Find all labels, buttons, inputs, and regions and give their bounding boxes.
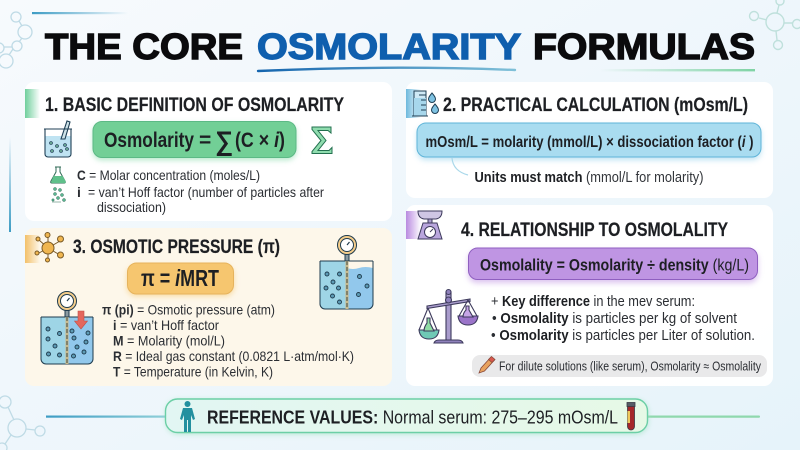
decorative side lines	[32, 12, 128, 14]
heading 1: 1. BASIC DEFINITION OF OSMOLARITY	[45, 95, 344, 116]
title	[45, 26, 755, 67]
formula pill: osmolarity	[93, 122, 296, 160]
formula pill: osmolality: Osmolality = Osmolarity ÷ density (kg/L)	[480, 256, 749, 274]
definition text: i: i	[77, 184, 81, 200]
panel 2: practical calculation	[406, 82, 773, 198]
molecule decoration: bottom left	[0, 396, 45, 450]
definition list: variables: i = van’t Hoff factor	[113, 317, 219, 333]
reference values bar	[166, 399, 648, 434]
panel 4: relationship to osmolality	[406, 205, 773, 386]
title underlines	[258, 68, 755, 71]
formula pill: osmolality	[468, 248, 758, 283]
reference connector lines	[46, 416, 760, 418]
note bar	[472, 355, 767, 377]
icon: particles	[52, 188, 66, 202]
formula pill: mOsm/L	[417, 123, 761, 160]
definition text: C: C = Molar concentration (moles/L)	[77, 167, 260, 183]
title: THE CORE	[45, 26, 243, 67]
title: FORMULAS	[533, 26, 755, 67]
definition list: variables: π (pi) = Osmotic pressure (atm)	[102, 302, 275, 318]
icon: person	[180, 401, 195, 432]
icon: kitchen scale	[418, 211, 442, 239]
icon: beaker	[44, 121, 72, 157]
icon: balance scale	[419, 290, 478, 343]
heading 4: 4. RELATIONSHIP TO OSMOLALITY	[461, 220, 728, 241]
title: OSMOLARITY	[257, 26, 521, 67]
formula pill: osmolarity: Osmolarity	[104, 129, 194, 152]
key difference text: + Key difference in the mev serum:	[491, 293, 695, 310]
panel 1: basic definition	[25, 82, 392, 221]
icon: right osmosis tank	[320, 236, 373, 309]
definition list: variables: M = Molarity (mol/L)	[113, 332, 225, 348]
definition list: variables: T = Temperature (in Kelvin, K)	[113, 364, 273, 380]
reference text: REFERENCE VALUES: Normal serum: 275–295 mOsm/L	[207, 406, 618, 428]
molecule decoration: top right	[750, 0, 800, 50]
icon: pencil	[479, 356, 495, 373]
icon: molecule	[35, 232, 64, 262]
connector	[452, 158, 468, 175]
icon: test tube	[627, 402, 635, 430]
formula pill: osmolarity: =	[199, 129, 211, 152]
icon: flask	[51, 167, 66, 183]
definition list: variables	[102, 302, 354, 380]
molecule decoration: top left	[0, 12, 32, 68]
key difference text	[491, 293, 755, 344]
panel 3: osmotic pressure	[25, 228, 392, 386]
heading 2: 2. PRACTICAL CALCULATION (mOsm/L)	[443, 95, 748, 116]
definition text: van't Hoff: = van’t Hoff factor (number of particles after	[88, 184, 324, 200]
note: units must match: Units must match (mmol/L for molarity)	[474, 170, 704, 186]
key difference text: • Osmolality is particles per kg of solvent	[492, 310, 738, 327]
formula pill: pi = iMRT: π = iMRT	[141, 265, 219, 291]
formula pill: osmolarity: (C × i)	[235, 129, 285, 152]
definition text: continuation: dissociation)	[97, 199, 166, 215]
formula pill: pi = iMRT	[127, 263, 234, 296]
icon: sigma	[312, 127, 332, 154]
icon: cylinder and drops	[412, 91, 438, 116]
key difference text: • Osmolarity is particles per Liter of solution.	[491, 327, 755, 344]
icon: left osmosis tank	[41, 292, 93, 364]
definition list: variables: R = Ideal gas constant (0.0821 L·atm/mol·K)	[113, 348, 354, 364]
formula pill: osmolarity: ∑	[215, 126, 233, 156]
heading 3: 3. OSMOTIC PRESSURE (π)	[73, 237, 280, 258]
